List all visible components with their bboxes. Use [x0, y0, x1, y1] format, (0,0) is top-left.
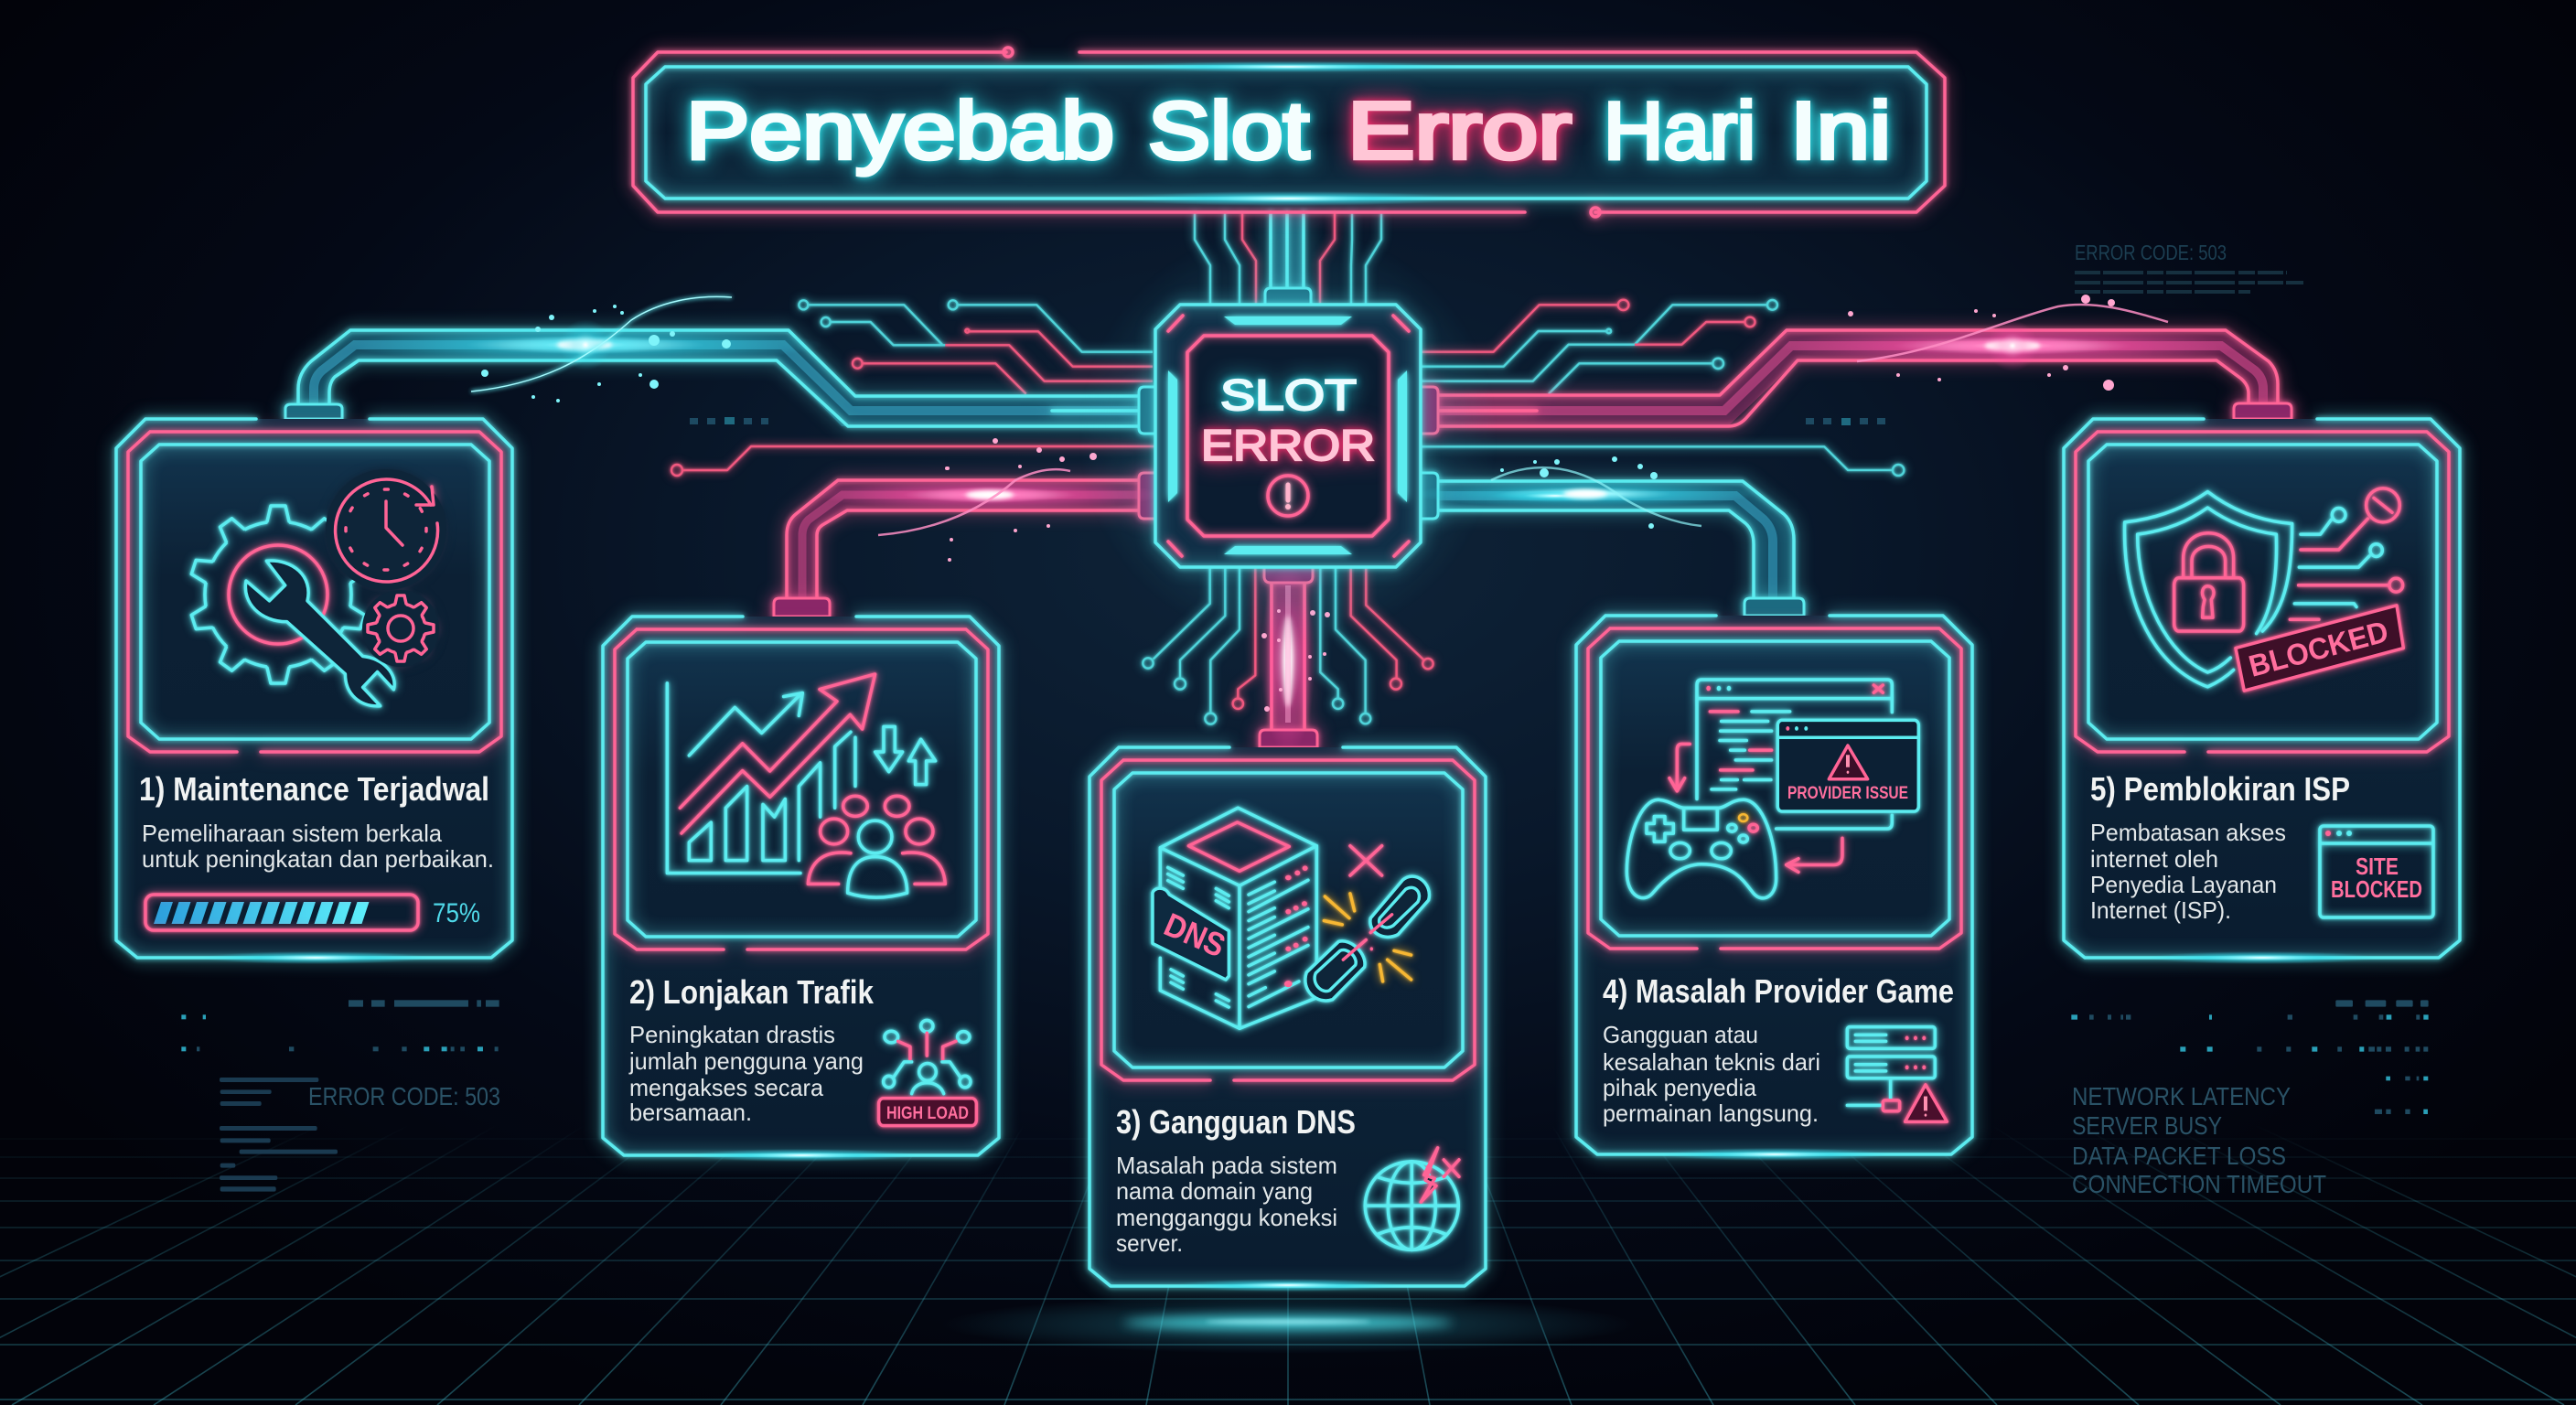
energy sparkle: cyan right pipe [1411, 456, 1759, 529]
icon: gear, wrench and clock [166, 469, 446, 706]
description: card 2: mengakses secara [629, 1074, 824, 1101]
icon: site blocked window: SITE [2356, 853, 2399, 880]
circuit traces: title to hub [1195, 212, 1381, 305]
heading: card 1: 1) Maintenance Terjadwal [139, 770, 489, 808]
icon: rising chart and users [667, 674, 945, 897]
progress bar 75% [145, 895, 480, 930]
right background data: network status: CONNECTION TIMEOUT [2072, 1170, 2326, 1198]
right background data: network status [2071, 1000, 2429, 1198]
description: card 3: nama domain yang [1116, 1177, 1313, 1205]
top right background error code: ERROR CODE: 503 [2075, 241, 2227, 264]
pipe: hub to card 4 [1421, 473, 1804, 616]
description: card 2 [628, 1021, 864, 1126]
card 2: traffic spike [603, 617, 999, 1162]
icon: globe with lightning [1365, 1148, 1459, 1249]
description: card 3: mengganggu koneksi [1116, 1204, 1337, 1231]
description: card 4 [1603, 1021, 1820, 1127]
title text: Hari [1604, 85, 1755, 176]
energy sparkle: cyan left pipe [348, 296, 823, 402]
central hub: slot error [1078, 225, 1498, 646]
card 1: maintenance [116, 419, 512, 964]
icon: game controller and provider issue window [1626, 680, 1918, 898]
icon: shield, lock and blocked stamp [2125, 488, 2403, 691]
description: card 4: kesalahan teknis dari [1603, 1048, 1820, 1076]
icon: high load network [879, 1020, 976, 1125]
circuit traces: right of hub [1418, 300, 1904, 476]
progress bar 75%: 75% [433, 898, 480, 928]
left background data: error code [181, 1000, 500, 1192]
heading: card 5: 5) Pemblokiran ISP [2090, 770, 2350, 808]
description: card 5: Pembatasan akses [2090, 819, 2286, 846]
central hub: slot error: SLOT [1220, 370, 1357, 419]
status dots left and right [690, 417, 1885, 425]
icon: dns server and broken chain: DNS [1159, 906, 1231, 964]
pipe: hub to card 1 [285, 330, 1155, 434]
description: card 5 [2090, 819, 2286, 924]
icon: site blocked window [2320, 826, 2433, 917]
right background data: network status: NETWORK LATENCY [2072, 1082, 2291, 1110]
top right background error code [2075, 241, 2303, 292]
right background data: network status: SERVER BUSY [2072, 1111, 2222, 1140]
title text: Error [1347, 85, 1572, 176]
description: card 3 [1116, 1152, 1337, 1257]
heading: card 4: 4) Masalah Provider Game [1603, 972, 1954, 1010]
description: card 4: permainan langsung. [1603, 1099, 1819, 1127]
title text: Penyebab [686, 85, 1114, 176]
description: card 3: server. [1116, 1229, 1183, 1257]
pipe: hub to card 5 [1421, 330, 2292, 434]
floor glow [940, 1295, 1636, 1354]
icon: dns server and broken chain [1153, 808, 1429, 1028]
description: card 1: Pemeliharaan sistem berkala [142, 820, 443, 847]
description: card 2: jumlah pengguna yang [628, 1047, 864, 1075]
title banner [633, 48, 1945, 217]
title text: Slot [1148, 85, 1309, 176]
description: card 2: Peningkatan drastis [629, 1021, 835, 1048]
heading: card 2: 2) Lonjakan Trafik [629, 973, 875, 1011]
description: card 2: bersamaan. [629, 1099, 752, 1126]
description: card 4: pihak penyedia [1603, 1074, 1757, 1101]
icon: shield, lock and blocked stamp: BLOCKED [2245, 614, 2392, 683]
card 4: game provider [1576, 616, 1972, 1161]
circuit traces: left of hub [671, 300, 1155, 476]
description: card 5: Penyedia Layanan [2090, 871, 2277, 898]
energy sparkle: bottom pipe [1261, 563, 1330, 755]
description: card 3: Masalah pada sistem [1116, 1152, 1337, 1179]
card 3: dns [1089, 747, 1486, 1292]
card 5: isp block [2064, 419, 2460, 964]
description: card 4: Gangguan atau [1603, 1021, 1758, 1048]
description: card 1: untuk peningkatan dan perbaikan. [142, 845, 494, 873]
right background data: network status: DATA PACKET LOSS [2072, 1142, 2286, 1170]
left background data: error code: ERROR CODE: 503 [308, 1082, 500, 1110]
description: card 1 [142, 820, 494, 873]
pipe: hub to card 2 [774, 473, 1155, 617]
icon: site blocked window: BLOCKED [2331, 875, 2422, 903]
circuit traces: hub to DNS card [1143, 567, 1433, 724]
description: card 5: internet oleh [2090, 845, 2218, 873]
icon: game controller and provider issue window: PROVIDER ISSUE [1787, 784, 1908, 803]
pipe: hub to card 3 [1260, 567, 1317, 747]
title text [686, 85, 1891, 176]
central hub: slot error: ERROR [1201, 421, 1375, 469]
icon: high load network: HIGH LOAD [886, 1104, 969, 1123]
description: card 5: Internet (ISP). [2090, 896, 2231, 924]
heading: card 3: 3) Gangguan DNS [1116, 1103, 1356, 1141]
icon: server warning [1847, 1027, 1947, 1121]
title text: Ini [1790, 85, 1891, 176]
pipe: title to hub [1265, 212, 1311, 305]
energy sparkle: pink left pipe [816, 438, 1164, 562]
energy sparkle: pink right pipe [1775, 295, 2250, 391]
